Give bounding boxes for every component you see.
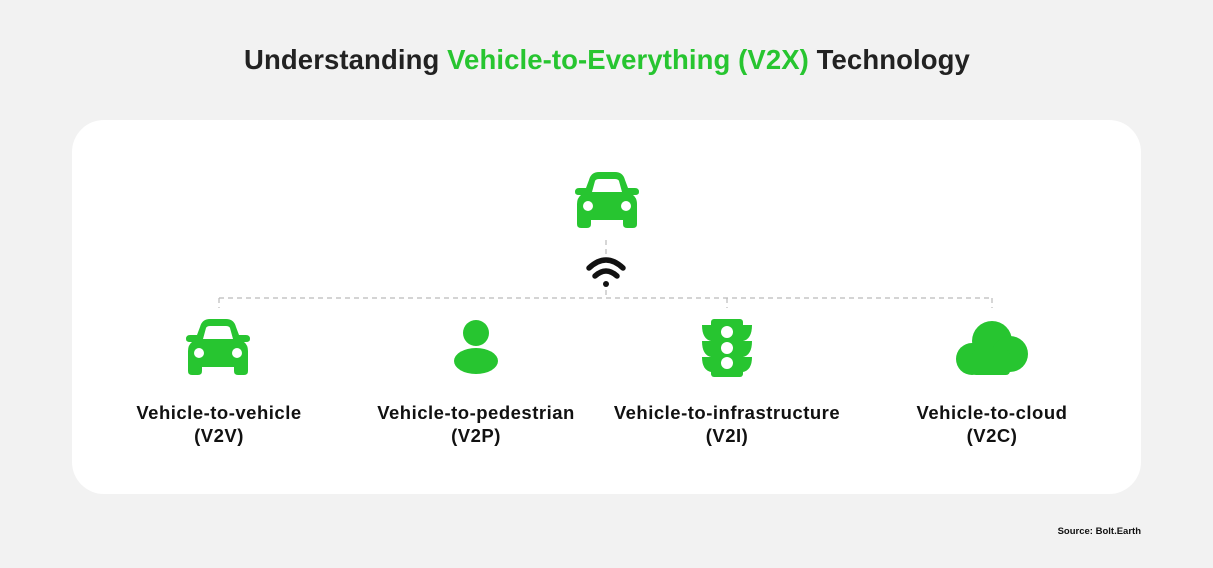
title: Understanding Vehicle-to-Everything (V2X) Technology (244, 44, 971, 75)
icon: top car (575, 172, 639, 228)
labels: (V2C) (967, 425, 1017, 446)
connector lines (219, 240, 992, 308)
icon: pedestrian (454, 320, 498, 374)
labels: Vehicle-to-infrastructure (614, 402, 840, 423)
icon: wifi (589, 260, 623, 287)
icon: traffic light (702, 319, 752, 377)
source: Source: Bolt.Earth (1058, 526, 1141, 537)
labels: Vehicle-to-cloud (917, 402, 1067, 423)
labels: (V2P) (451, 425, 501, 446)
panel: main card (72, 120, 1141, 494)
labels: Vehicle-to-pedestrian (377, 402, 575, 423)
labels (136, 402, 1067, 446)
labels: (V2I) (706, 425, 748, 446)
labels: Vehicle-to-vehicle (136, 402, 302, 423)
icon: V2V car (186, 319, 250, 375)
icon: cloud (956, 321, 1028, 375)
labels: (V2V) (194, 425, 244, 446)
